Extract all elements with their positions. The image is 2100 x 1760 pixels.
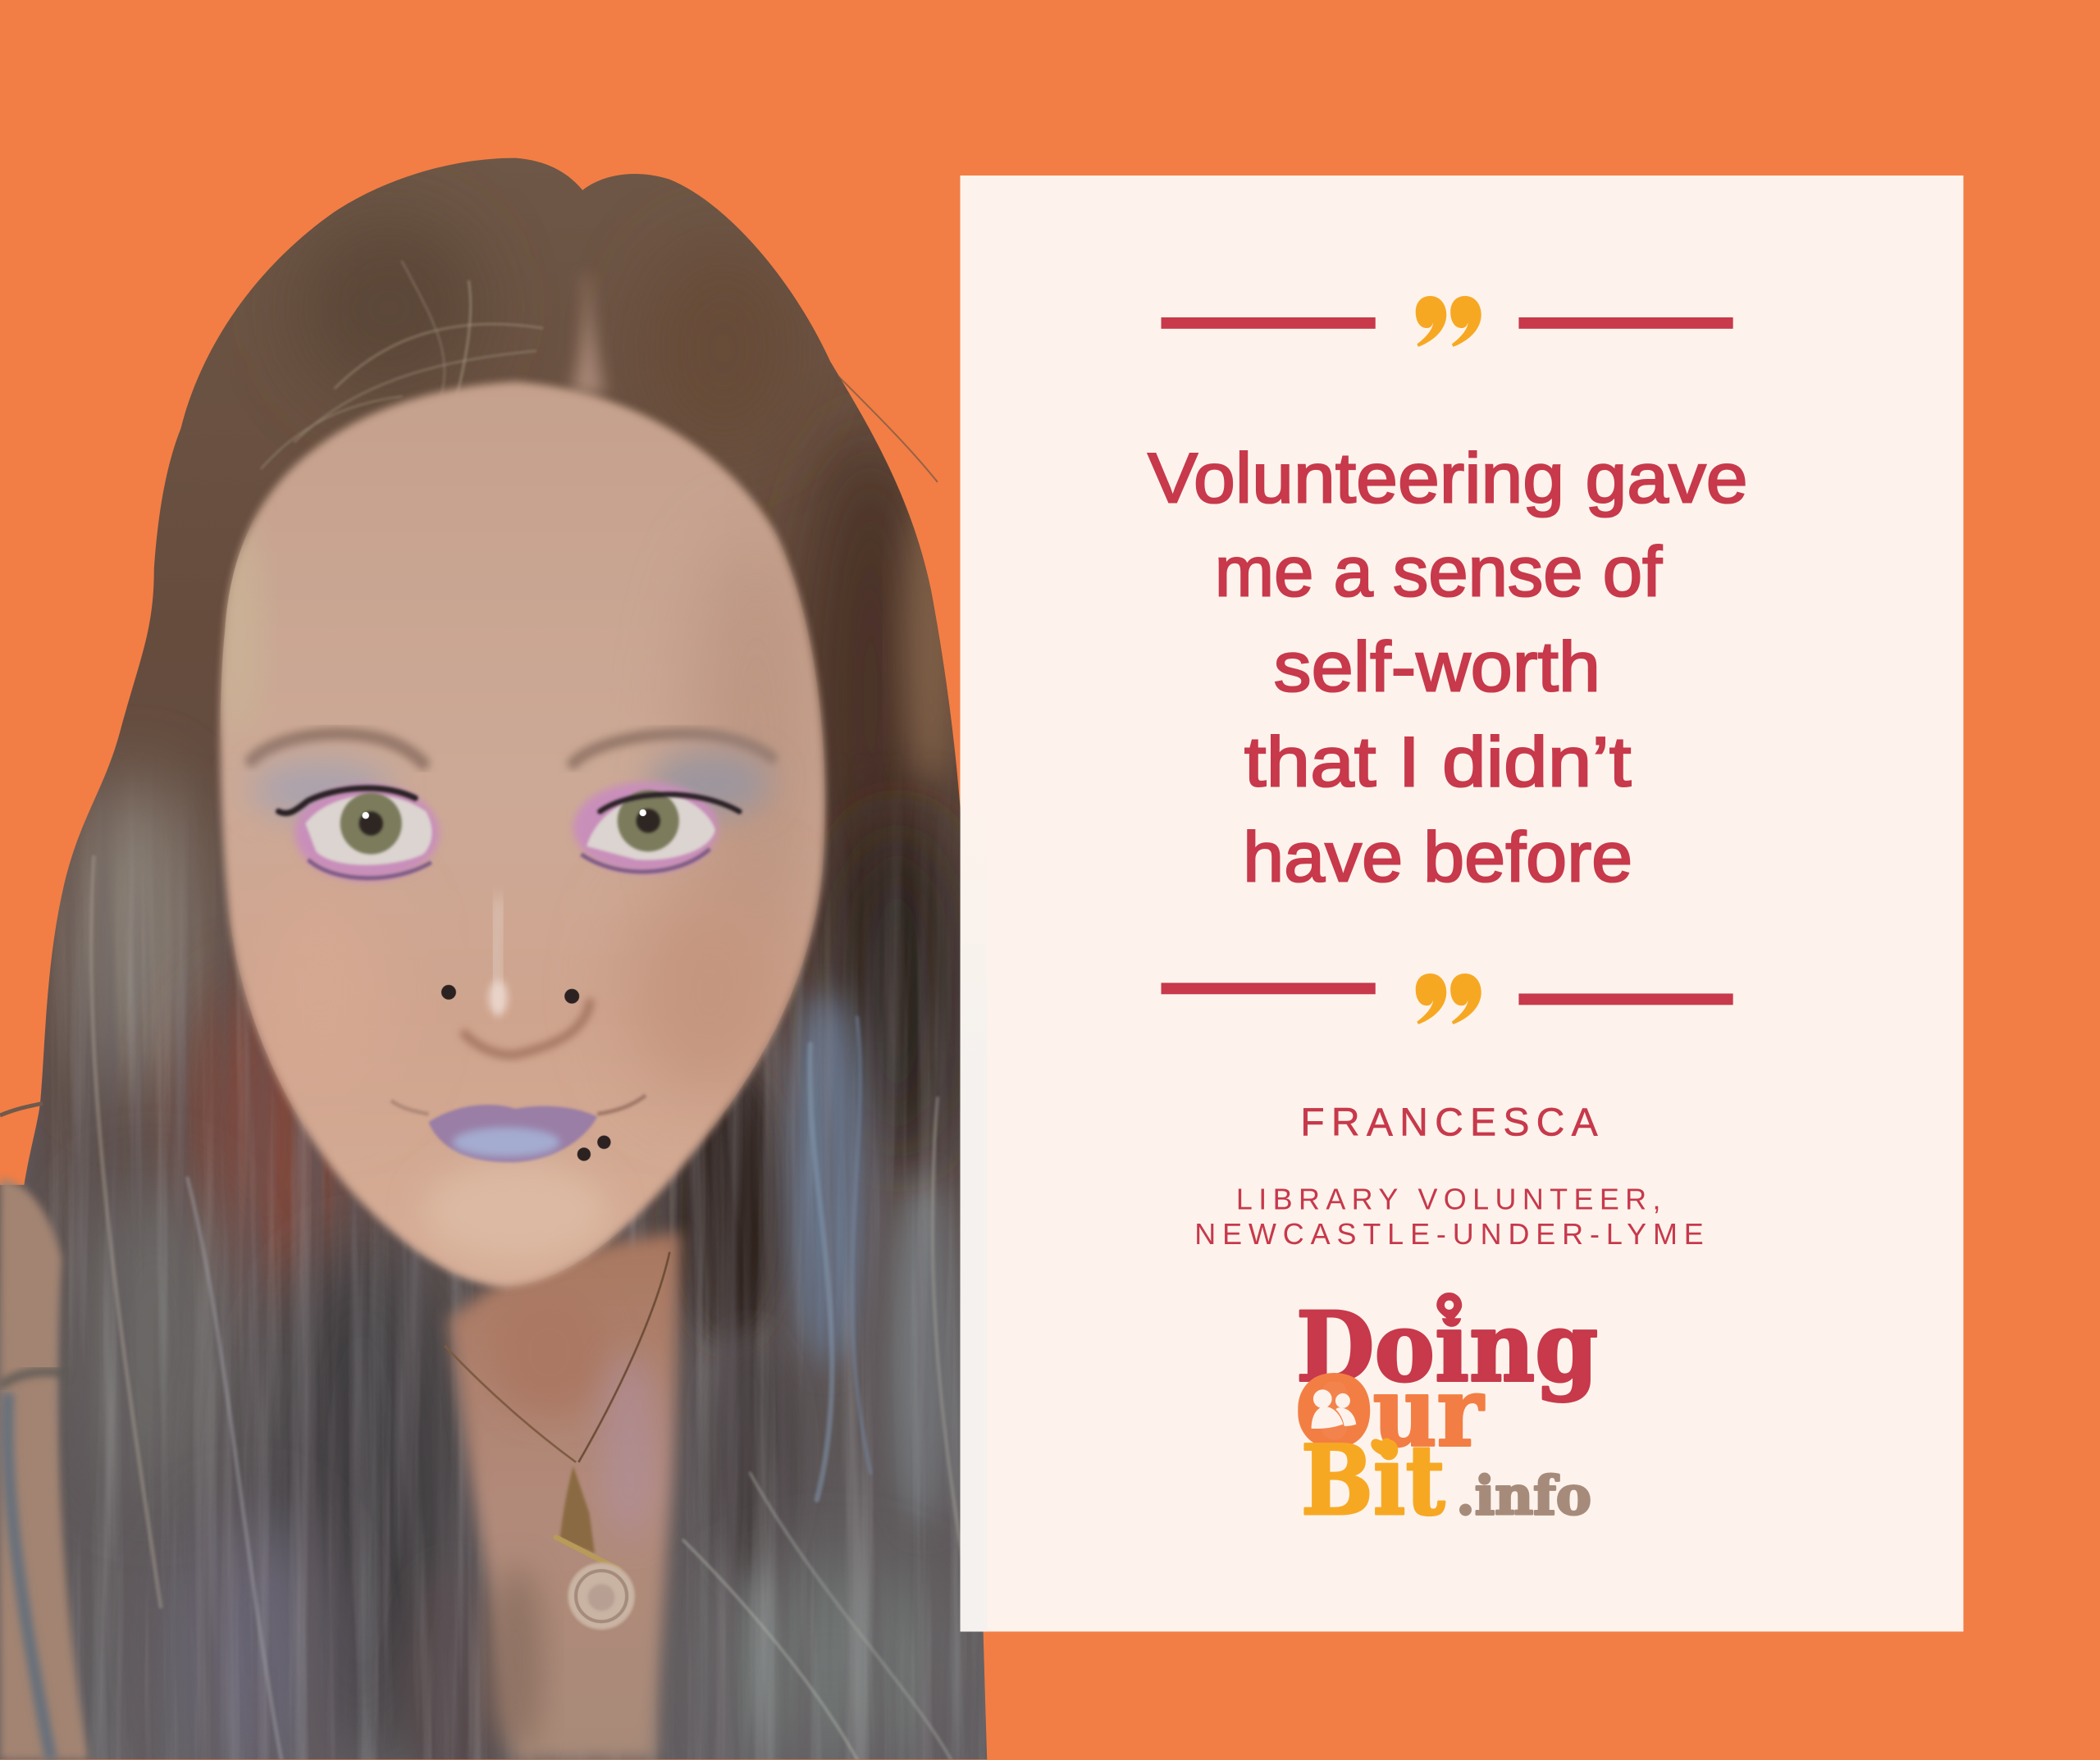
role and location: LIBRARY VOLUNTEER, xyxy=(1236,1182,1660,1215)
hair xyxy=(0,158,991,1760)
face xyxy=(217,381,824,1287)
icon: location pin xyxy=(1434,1293,1464,1322)
flyaway strand xyxy=(837,375,938,482)
photo: portrait of Francesca xyxy=(0,158,991,1760)
neck and chest xyxy=(449,1232,680,1759)
role and location xyxy=(1194,1182,1704,1251)
lips xyxy=(391,1096,646,1162)
quote text: self-worth xyxy=(1274,627,1600,706)
lower divider with quotation mark xyxy=(1162,973,1733,1024)
quote text: Volunteering gave xyxy=(1148,439,1748,518)
logo word: .info: .info xyxy=(1456,1465,1591,1527)
right eye xyxy=(573,751,771,873)
necklace xyxy=(445,1252,669,1630)
left eye xyxy=(252,760,440,881)
logo word: Bit: Bit xyxy=(1301,1424,1445,1537)
panel: quote card xyxy=(961,176,1963,1631)
name: FRANCESCA xyxy=(1300,1101,1599,1145)
logo: Doing Our Bit .info xyxy=(1296,1290,1598,1537)
nose xyxy=(441,897,591,1055)
left shoulder xyxy=(0,1103,89,1759)
quote text: that I didn’t xyxy=(1244,723,1632,801)
icon: heart xyxy=(1371,1439,1391,1455)
quote text: me a sense of xyxy=(1215,533,1663,612)
quote text xyxy=(1148,439,1748,896)
logo word: Doing: Doing xyxy=(1296,1290,1598,1403)
hair texture xyxy=(0,750,991,1760)
parting xyxy=(571,275,605,395)
logo word: Our: Our xyxy=(1296,1356,1485,1469)
eyebrows xyxy=(252,734,771,764)
role and location: NEWCASTLE-UNDER-LYME xyxy=(1194,1217,1704,1251)
icon: people xyxy=(1312,1389,1356,1429)
top divider with quotation mark xyxy=(1162,296,1733,347)
quote text: have before xyxy=(1243,818,1632,896)
